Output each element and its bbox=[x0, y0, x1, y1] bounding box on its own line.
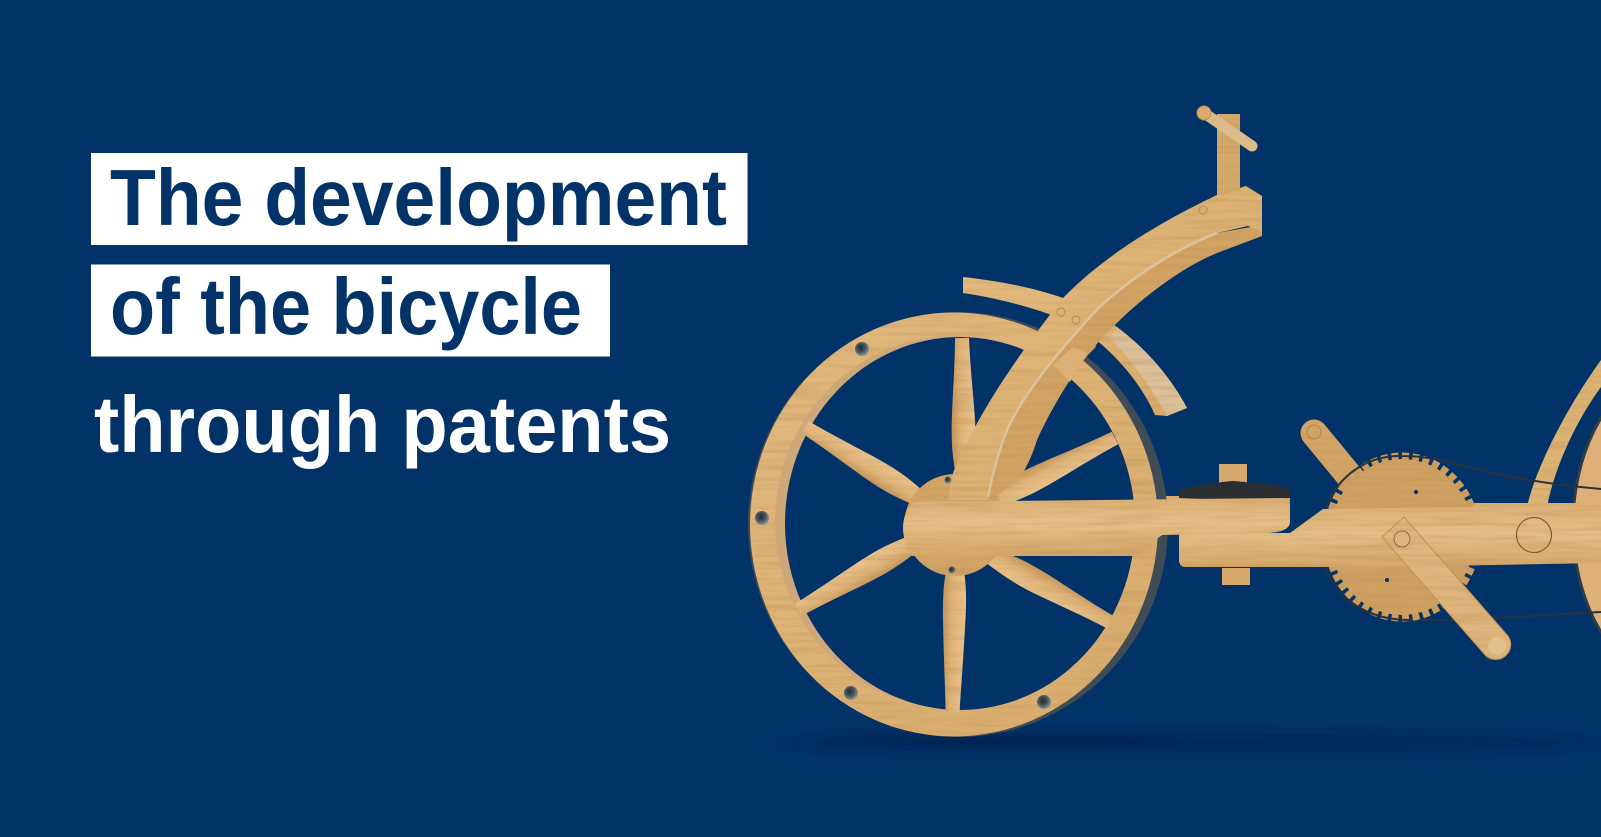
rear fender bbox=[1527, 360, 1601, 507]
fork front band bbox=[948, 186, 1262, 500]
rear wheel bbox=[1573, 360, 1601, 690]
lower crank bbox=[1382, 517, 1511, 660]
upper crank bbox=[1307, 425, 1365, 495]
fork rear band bbox=[988, 225, 1262, 500]
wooden bicycle illustration bbox=[748, 106, 1601, 737]
spokes bbox=[792, 338, 1120, 712]
hub bbox=[904, 474, 1006, 576]
lower peg bbox=[1222, 568, 1250, 585]
frame pivot circle bbox=[1516, 518, 1552, 552]
front wheel bbox=[748, 312, 1168, 737]
thin rails behind bars bbox=[1030, 496, 1580, 509]
wheel opening bbox=[785, 337, 1135, 710]
title line 1 highlight: The development bbox=[110, 153, 727, 242]
chain bbox=[1400, 458, 1601, 620]
rim bolts bbox=[755, 342, 1051, 709]
black pivot cap bbox=[1179, 481, 1290, 500]
chainring gear bbox=[1325, 456, 1477, 620]
handlebar bbox=[1197, 106, 1252, 146]
lower frame bar bbox=[1179, 505, 1601, 567]
ground shadow bbox=[790, 733, 1590, 753]
upper peg bbox=[1219, 464, 1247, 483]
seat post bbox=[1217, 114, 1240, 196]
main wheel bar bbox=[903, 498, 1290, 556]
title line 2 highlight: of the bicycle bbox=[110, 262, 582, 351]
fork lower edge highlight bbox=[988, 233, 1217, 497]
tire bbox=[748, 312, 1168, 737]
title bbox=[91, 153, 748, 469]
bracket under fork bbox=[1068, 338, 1096, 363]
fork screws bbox=[1057, 206, 1207, 324]
rim bbox=[750, 312, 1158, 736]
rim section crossing the fork bbox=[1053, 347, 1087, 382]
front fender bbox=[963, 277, 1187, 416]
rim inner wall bbox=[775, 336, 1131, 708]
title line 3: through patents bbox=[94, 380, 671, 469]
